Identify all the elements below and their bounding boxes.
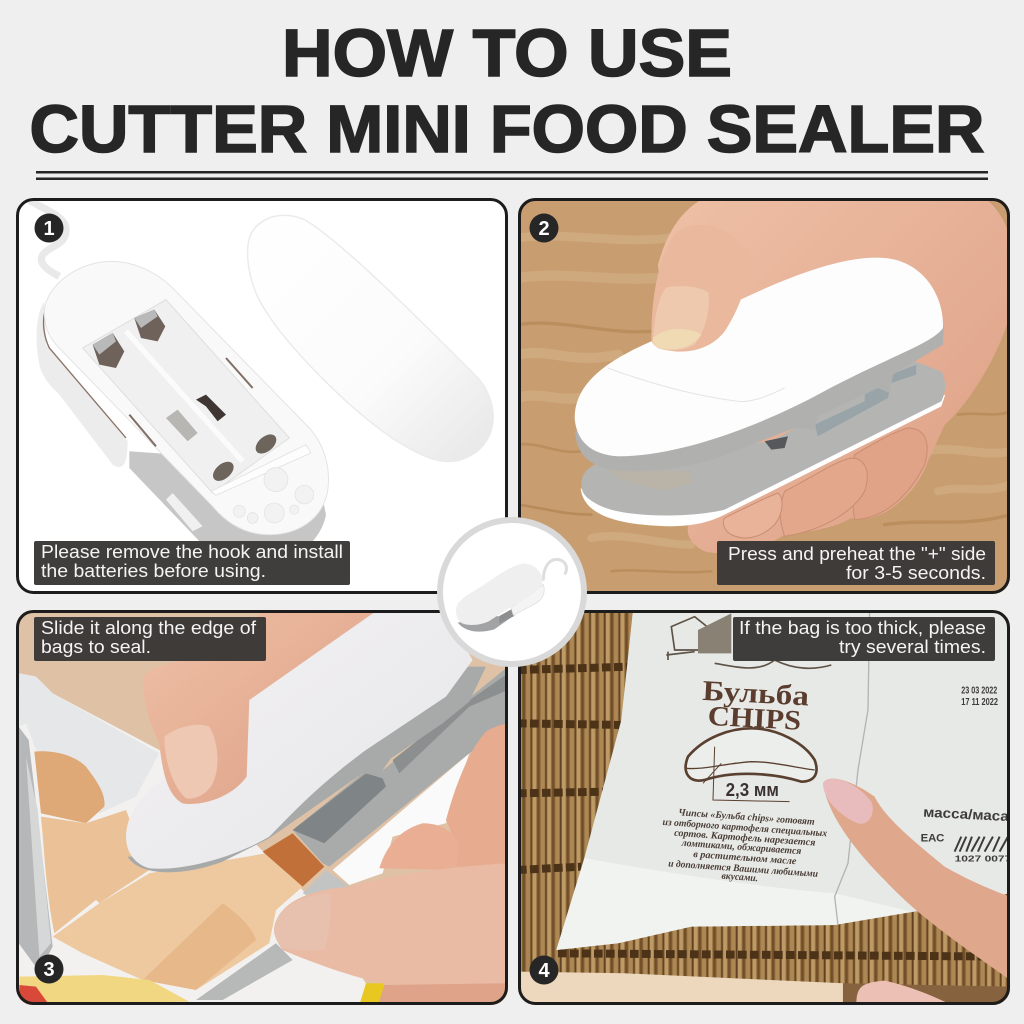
thumb nail	[653, 286, 709, 350]
caption 3: bags to seal.	[41, 637, 151, 657]
caption 1: the batteries before using.	[41, 561, 266, 581]
caption 1	[34, 541, 350, 585]
blue-grey channels	[815, 365, 916, 436]
small print: сортов. Картофель нарезается	[674, 828, 816, 849]
lower finger	[856, 981, 951, 1005]
sealer base with battery compartment	[26, 198, 328, 565]
silver blade	[196, 943, 293, 1000]
product shadow	[458, 616, 511, 632]
lower plate white underside	[581, 395, 945, 526]
top shell	[126, 610, 473, 869]
small print: и дополняется Вашими любимыми	[668, 858, 819, 880]
step number 4	[530, 956, 558, 984]
finger 2	[780, 458, 867, 536]
title	[30, 16, 984, 167]
shell lip	[128, 667, 486, 872]
orange strip	[263, 833, 324, 887]
lower plate grey	[581, 361, 945, 516]
dates and weight: 23 03 2022	[961, 685, 998, 696]
right finger	[446, 723, 508, 873]
house illustration	[666, 617, 831, 668]
small print: ломтиками, обжаривается	[680, 838, 802, 857]
pink nail	[823, 779, 873, 824]
dates and weight: 17 11 2022	[961, 697, 998, 708]
step number 1: 1	[43, 218, 55, 240]
white bag	[16, 673, 379, 1005]
panel 4: thick bag: 2,3 мм	[726, 779, 779, 800]
bamboo mat	[518, 610, 1010, 1005]
brand name: CHIPS	[707, 701, 802, 737]
caption 4: If the bag is too thick, please	[739, 618, 986, 638]
panel 2: press and preheat	[518, 198, 1010, 594]
barcode	[955, 837, 1008, 852]
thumb	[651, 272, 741, 352]
metal strip	[608, 470, 691, 491]
step number 1	[34, 214, 64, 242]
caption 2	[717, 541, 995, 585]
caption 2: for 3-5 seconds.	[846, 563, 986, 583]
small print: из отборного картофеля специальных	[662, 817, 827, 839]
caption 2: Press and preheat the "+" side	[728, 544, 986, 564]
dates and weight: масса/маса/	[923, 804, 1014, 824]
bag bottom colours	[19, 975, 189, 1005]
wood grain	[518, 236, 1010, 572]
step number 3: 3	[43, 959, 55, 981]
brand name: Бульба	[702, 675, 810, 712]
caption 3	[34, 617, 266, 661]
top shell	[575, 258, 943, 456]
finger 3	[852, 428, 927, 520]
chips bag	[556, 610, 1010, 950]
dates and weight: 1027 0077	[955, 854, 1012, 864]
caption 3: Slide it along the edge of	[41, 618, 257, 638]
caption 1: Please remove the hook and install	[41, 542, 343, 562]
pointing finger	[823, 779, 1010, 980]
dates and weight	[921, 685, 1014, 864]
dates and weight: ЕАС	[921, 833, 944, 845]
title: HOW TO USE	[282, 16, 732, 91]
chips	[34, 751, 105, 823]
product body	[511, 584, 544, 615]
sealer cover	[248, 215, 493, 462]
title: CUTTER MINI FOOD SEALER	[30, 92, 984, 167]
icon: hook	[543, 559, 566, 579]
grey lip of top shell	[575, 325, 944, 471]
small print	[662, 807, 827, 884]
small print: в растительном масле	[693, 849, 797, 867]
white bag right	[333, 753, 469, 885]
silver strip	[19, 727, 53, 972]
nail	[164, 725, 217, 799]
icon: hook	[26, 198, 66, 276]
panel 1: remove hook and install batteries	[16, 198, 508, 594]
hand	[658, 198, 1010, 553]
chip thickness drawing	[686, 728, 817, 782]
caption 4	[733, 617, 995, 661]
panel 4: thick bag	[518, 610, 1014, 1005]
upper hand	[143, 610, 378, 804]
step number 2	[530, 214, 558, 242]
lower jaw	[293, 667, 508, 867]
finger 1	[723, 493, 782, 538]
brand name	[702, 681, 808, 730]
table below mat	[518, 972, 843, 1005]
seam	[835, 610, 870, 925]
step number 3	[34, 954, 64, 984]
step number 4: 4	[538, 960, 550, 982]
panel 3: slide along edge of bag	[16, 610, 508, 1007]
step number 2: 2	[538, 218, 550, 240]
small print: вкусами.	[721, 871, 758, 884]
caption 4: try several times.	[839, 637, 986, 657]
thumb	[274, 863, 508, 985]
center product badge	[440, 520, 584, 664]
small print: Чипсы «Бульба chips» готовят	[678, 807, 815, 828]
